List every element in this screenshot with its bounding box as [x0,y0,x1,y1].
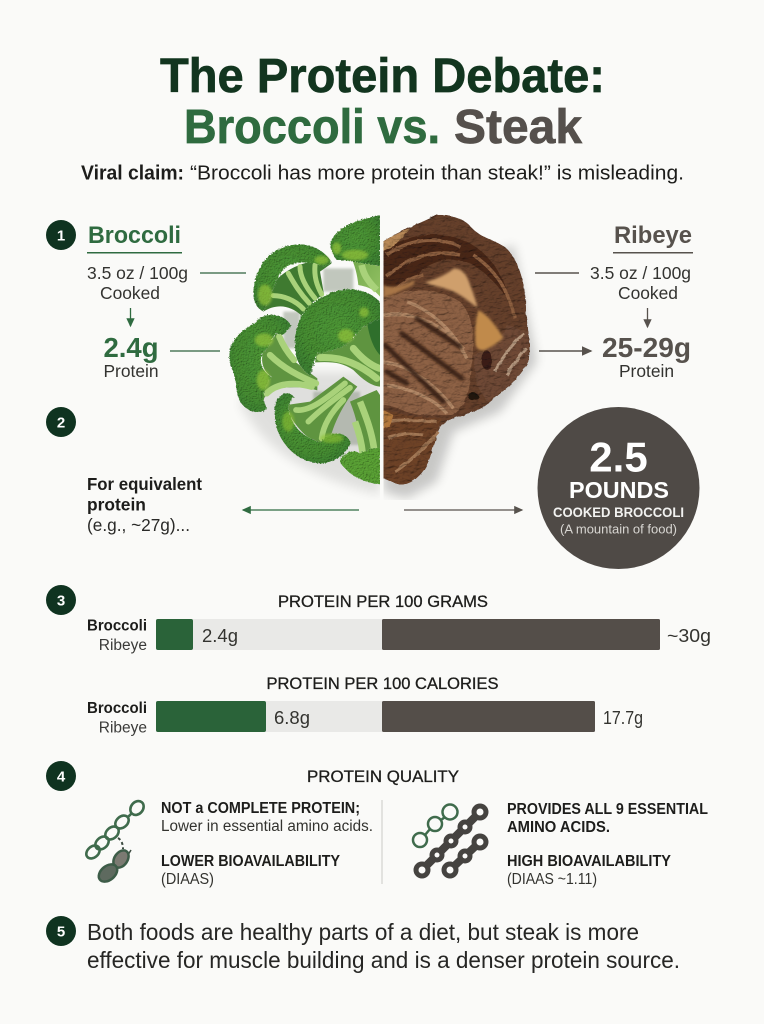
panel: ribeye facts: Ribeye [614,222,692,249]
right rim [473,325,528,402]
chart: protein per 100 grams: 2.4g [202,626,238,646]
panel: broccoli facts [87,222,246,381]
panel: broccoli facts: 2.4g [103,332,159,363]
step badge 4: 4 [57,768,66,786]
panel: broccoli facts: Cooked [100,283,160,303]
panel: ribeye facts: Protein [619,361,674,381]
floret: bottom right [340,390,380,484]
chart: protein per 100 calories: 6.8g [274,708,310,728]
text: ribeye protein quality: AMINO ACIDS. [507,819,610,836]
panel: ribeye facts [535,222,693,381]
callout: 2.5 pounds: (A mountain of food) [560,522,677,536]
eye of the ribeye [380,290,473,415]
callout: 2.5 pounds [538,407,700,569]
step badge 3 [46,585,76,615]
text: broccoli protein quality: (DIAAS) [161,871,214,888]
text: ribeye protein quality: HIGH BIOAVAILABILITY [507,853,672,870]
title: Steak [454,101,582,154]
text: ribeye protein quality [507,801,708,888]
upper sear band [384,234,506,296]
text: broccoli protein quality: Lower in essential amino acids. [161,818,373,835]
step badge 2 [46,407,76,437]
panel: broccoli facts: 3.5 oz / 100g [87,263,188,283]
step badge 1: 1 [57,228,65,244]
title: The Protein Debate: [160,50,605,103]
text: broccoli protein quality: NOT a COMPLETE PROTEIN; [161,800,360,817]
step badge 3: 3 [57,592,65,610]
panel: broccoli facts: Protein [103,361,159,381]
icon: complete amino acid chains [413,804,488,878]
subtitle: viral claim: “Broccoli has more protein than steak!” is misleading. [190,162,684,184]
subtitle: viral claim: Viral claim: [81,162,184,184]
arrow: to broccoli [243,509,359,511]
steak shadow [383,245,537,498]
text: broccoli protein quality [161,800,373,888]
heading: protein quality: PROTEIN QUALITY [307,768,459,786]
text: ribeye protein quality: (DIAAS ~1.11) [507,871,597,888]
chart: protein per 100 grams: PROTEIN PER 100 GRAMS [278,593,488,611]
chart: protein per 100 grams: ~30g [667,626,711,646]
chart: protein per 100 calories: Broccoli [87,700,147,717]
title [160,50,605,154]
conclusion text: Both foods are healthy parts of a diet, but steak is more [87,919,639,945]
chart: protein per 100 grams [87,593,711,654]
panel: broccoli facts: Broccoli [88,222,181,249]
step badge 4 [46,761,76,791]
steak body [380,215,530,485]
text: equivalent protein: protein [87,494,146,514]
title: Broccoli vs. [184,101,440,154]
chart: protein per 100 calories: PROTEIN PER 100 CALORIES [266,675,498,693]
floret shadow [240,372,380,495]
dark pockets [481,351,492,369]
icon: incomplete amino acid chain [84,798,146,885]
panel: ribeye facts: Cooked [618,283,678,303]
panel: ribeye facts: 25-29g [602,332,691,363]
text: ribeye protein quality: PROVIDES ALL 9 ESSENTIAL [507,801,708,818]
step badge 1 [46,220,76,250]
floret: center [295,289,380,387]
floret: top right [330,215,380,297]
chart: protein per 100 grams: Ribeye [99,637,147,654]
fat cap patches [425,268,477,308]
callout: 2.5 pounds: POUNDS [569,477,669,503]
step badge 5 [46,916,76,946]
text: broccoli protein quality: LOWER BIOAVAILABILITY [161,853,341,870]
text: equivalent protein: (e.g., ~27g)... [87,515,190,535]
conclusion text [87,919,680,973]
floret: left [229,315,317,412]
grill marks [385,318,462,402]
floret: upper left [253,244,332,316]
illustration: ribeye half [380,215,537,498]
arrow: to circle [404,509,522,511]
panel: ribeye facts: 3.5 oz / 100g [590,263,691,283]
step badge 5: 5 [57,924,65,940]
callout: 2.5 pounds: COOKED BROCCOLI [553,505,684,520]
conclusion text: effective for muscle building and is a denser protein source. [87,947,680,973]
step badge 2: 2 [57,414,65,432]
chart: protein per 100 calories [87,675,643,736]
illustration: broccoli half [229,215,380,495]
chart: protein per 100 calories: 17.7g [603,708,643,728]
chart: protein per 100 calories: Ribeye [99,720,147,736]
text: equivalent protein: For equivalent [87,474,202,494]
floret: bottom center [275,377,357,464]
chart: protein per 100 grams: Broccoli [87,618,147,634]
bottom tail [384,411,440,484]
callout: 2.5 pounds: 2.5 [589,434,648,480]
text: equivalent protein [87,474,202,535]
